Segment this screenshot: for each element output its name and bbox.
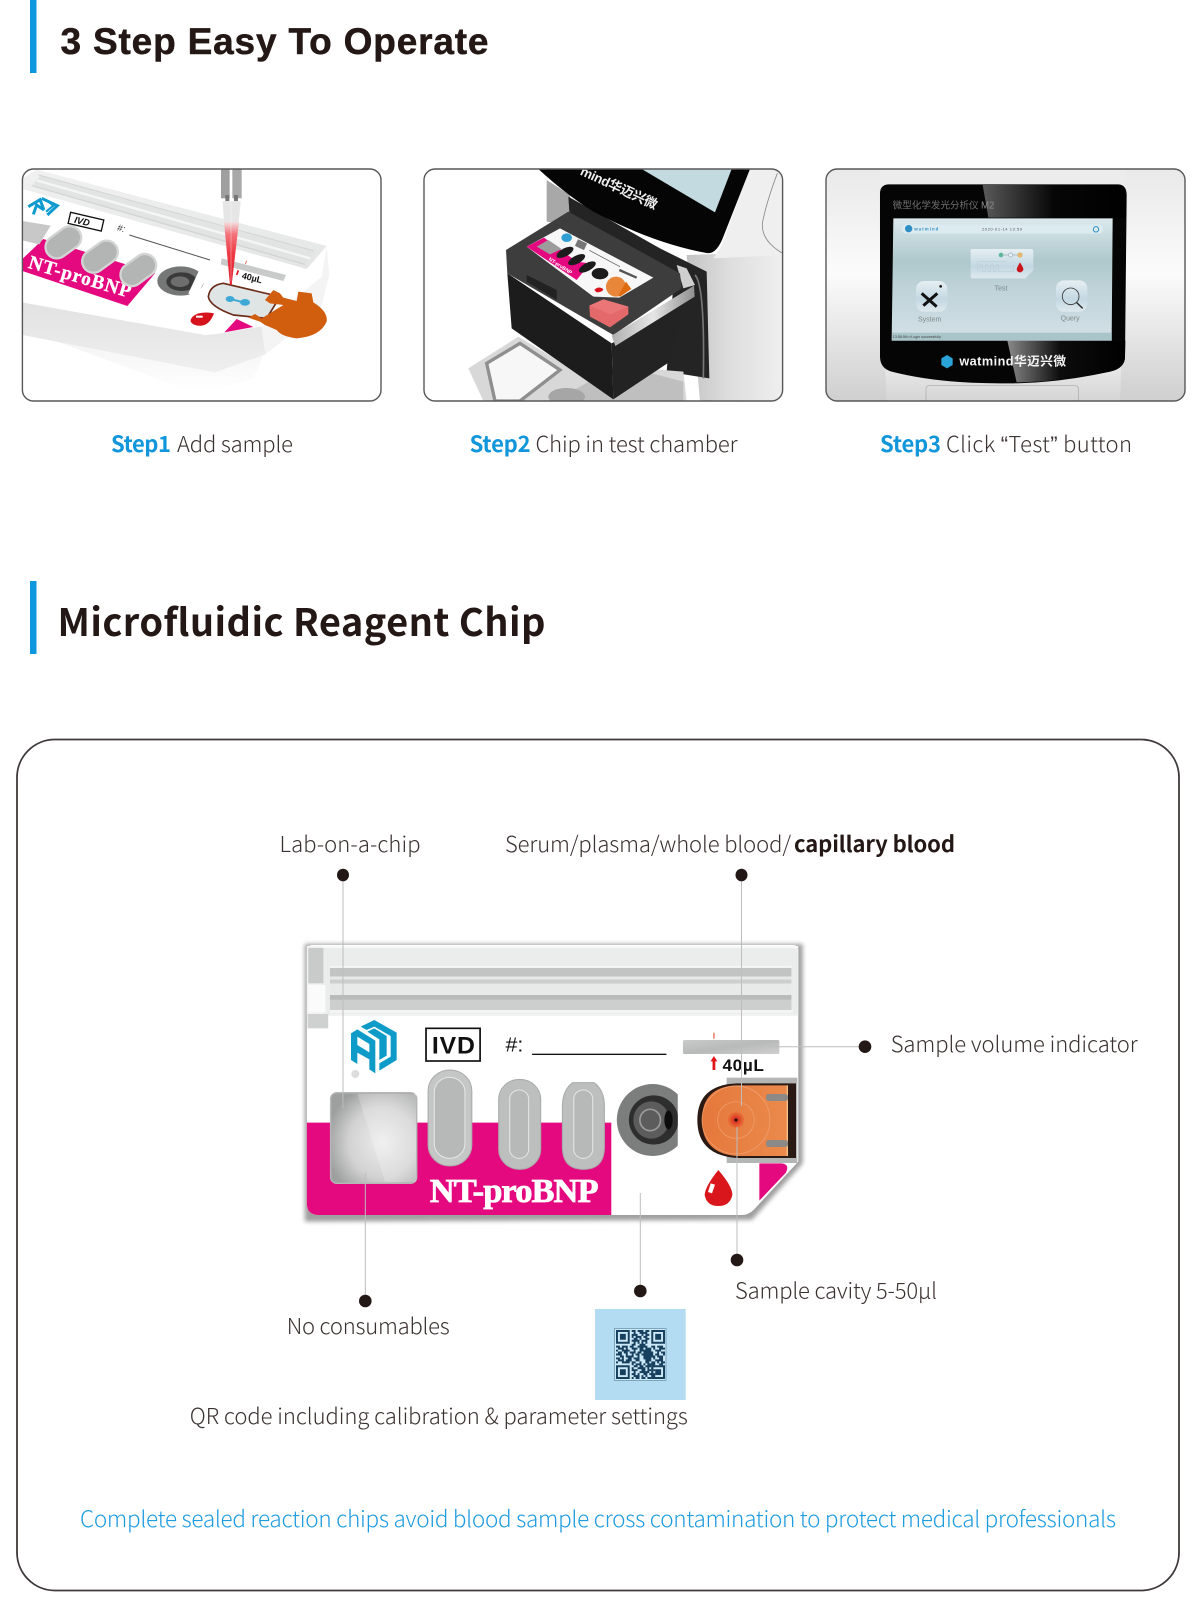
brand text: mind华迈兴微 <box>578 163 661 213</box>
panel: step 2 image <box>468 170 782 400</box>
chip shadow <box>305 944 803 1222</box>
company logo <box>351 1020 397 1078</box>
chip body <box>307 945 798 1215</box>
header strip <box>902 224 1103 234</box>
label: Sample cavity: Sample cavity 5-50μl <box>735 1274 937 1306</box>
panel: step 1 frame <box>22 169 381 401</box>
pipette <box>221 169 242 285</box>
blood drop <box>191 312 214 326</box>
serial field: #: <box>506 1034 523 1057</box>
system icon <box>916 281 947 312</box>
orange cap <box>248 290 327 338</box>
top rail <box>307 946 798 1028</box>
brand small: watmind <box>913 226 939 231</box>
serial line: #: <box>116 223 127 234</box>
leader: sample cavity <box>731 1127 743 1266</box>
dial <box>157 266 204 296</box>
chip in tray <box>527 228 653 298</box>
reagent wells <box>428 1070 604 1169</box>
label: Lab-on-a-chip: Lab-on-a-chip <box>280 827 420 859</box>
bezel <box>880 184 1127 383</box>
sample cavity <box>208 283 280 318</box>
bezel gloss top <box>982 185 1048 218</box>
chip illustration <box>305 944 803 1222</box>
box <box>507 273 613 399</box>
chamber <box>568 197 709 378</box>
magenta band <box>22 239 155 306</box>
status text: 13:58:56>>Login successfully <box>893 335 941 339</box>
magenta corner <box>224 319 253 332</box>
leader: sample type <box>736 869 748 1106</box>
label: QR code: QR code including calibration & parameter settings <box>190 1399 688 1431</box>
heading bar: microfluidic <box>30 581 36 654</box>
panel: step 1 image <box>23 170 329 372</box>
IVD mark: IVD <box>432 1033 475 1060</box>
chip rail <box>22 170 327 269</box>
test icon <box>971 249 1033 278</box>
bezel gloss bottom <box>1007 341 1125 382</box>
IVD label: IVD <box>73 215 91 228</box>
IVD mark <box>426 1028 480 1061</box>
title: 3 Step Easy To Operate: 3 Step Easy To Operate <box>60 21 488 62</box>
heading bar: 3 step <box>30 0 36 73</box>
leader: QR code <box>634 1193 647 1297</box>
caption: step 3: Step3 <box>880 427 941 459</box>
screen <box>892 218 1113 341</box>
NT-proBNP label: NT-proBNP <box>26 252 134 303</box>
NT-proBNP label: NT-proBNP <box>430 1173 599 1210</box>
brand logo <box>941 355 953 368</box>
caption: step 1 <box>111 427 293 459</box>
leader: no consumables <box>359 1173 372 1307</box>
pink block <box>589 299 628 327</box>
panel: step 3 frame <box>826 169 1185 401</box>
label: sample types <box>505 827 955 859</box>
window <box>331 1093 417 1183</box>
panel: step 1 image: 40µL <box>241 271 264 285</box>
magenta band <box>307 1123 611 1215</box>
QR code tile <box>595 1309 686 1400</box>
chip top surface <box>206 328 254 335</box>
chip name: NT-proBNP <box>547 257 573 277</box>
metal rail <box>612 286 695 346</box>
caption: step 1: Step1 <box>111 427 171 459</box>
volume indicator: 40µL <box>723 1056 764 1075</box>
orange cap <box>606 277 626 297</box>
panel: step 2 frame <box>424 169 783 401</box>
brand name: watmind华迈兴微 <box>958 354 1066 369</box>
model label: 微型化学发光分析仪 M2 <box>893 200 994 212</box>
query icon <box>1056 280 1087 312</box>
chip side wall <box>22 302 265 372</box>
date: 2020-01-14 13:59 <box>982 226 1023 231</box>
indicator <box>221 258 286 281</box>
lower tray <box>468 337 687 405</box>
label: No consumables: No consumables <box>287 1309 450 1341</box>
caption: step 3: Click “Test” button <box>946 427 1132 459</box>
screen <box>642 169 732 212</box>
caption: step 2: Chip in test chamber <box>536 427 738 459</box>
caption: step 2: Step2 <box>470 427 531 459</box>
sample cavity cap <box>697 1078 797 1206</box>
blood drop <box>705 1170 732 1206</box>
analyzer body <box>687 252 783 401</box>
query label: Query <box>1061 315 1080 322</box>
logo <box>28 198 57 215</box>
panel: step 3 image <box>826 169 1185 401</box>
bezel <box>538 169 750 253</box>
pills <box>44 225 158 288</box>
test label: Test <box>995 285 1008 292</box>
title: Microfluidic Reagent Chip: Microfluidic Reagent Chip <box>58 592 546 647</box>
caption: step 1: Add sample <box>177 427 293 459</box>
label: sample types: Serum/plasma/whole blood/ <box>505 827 791 859</box>
IVD label <box>68 212 104 231</box>
dial <box>617 1084 688 1156</box>
window <box>22 221 51 244</box>
label: sample types: capillary blood <box>794 827 955 859</box>
leader: volume indicator <box>768 1040 871 1053</box>
volume indicator <box>683 1033 779 1075</box>
analyzer body <box>886 366 1122 392</box>
magenta corner <box>759 1163 787 1201</box>
system label: System <box>918 316 941 323</box>
label: Sample volume indicator: Sample volume indicator <box>891 1027 1138 1059</box>
callout: sealed chips: Complete sealed reaction chips avoid blood sample cross contamination to protect medical professionals <box>80 1502 1116 1534</box>
leader: lab-on-a-chip <box>337 869 349 1108</box>
panel: chip diagram frame <box>17 740 1179 1590</box>
chip side wall reflection <box>62 343 116 354</box>
